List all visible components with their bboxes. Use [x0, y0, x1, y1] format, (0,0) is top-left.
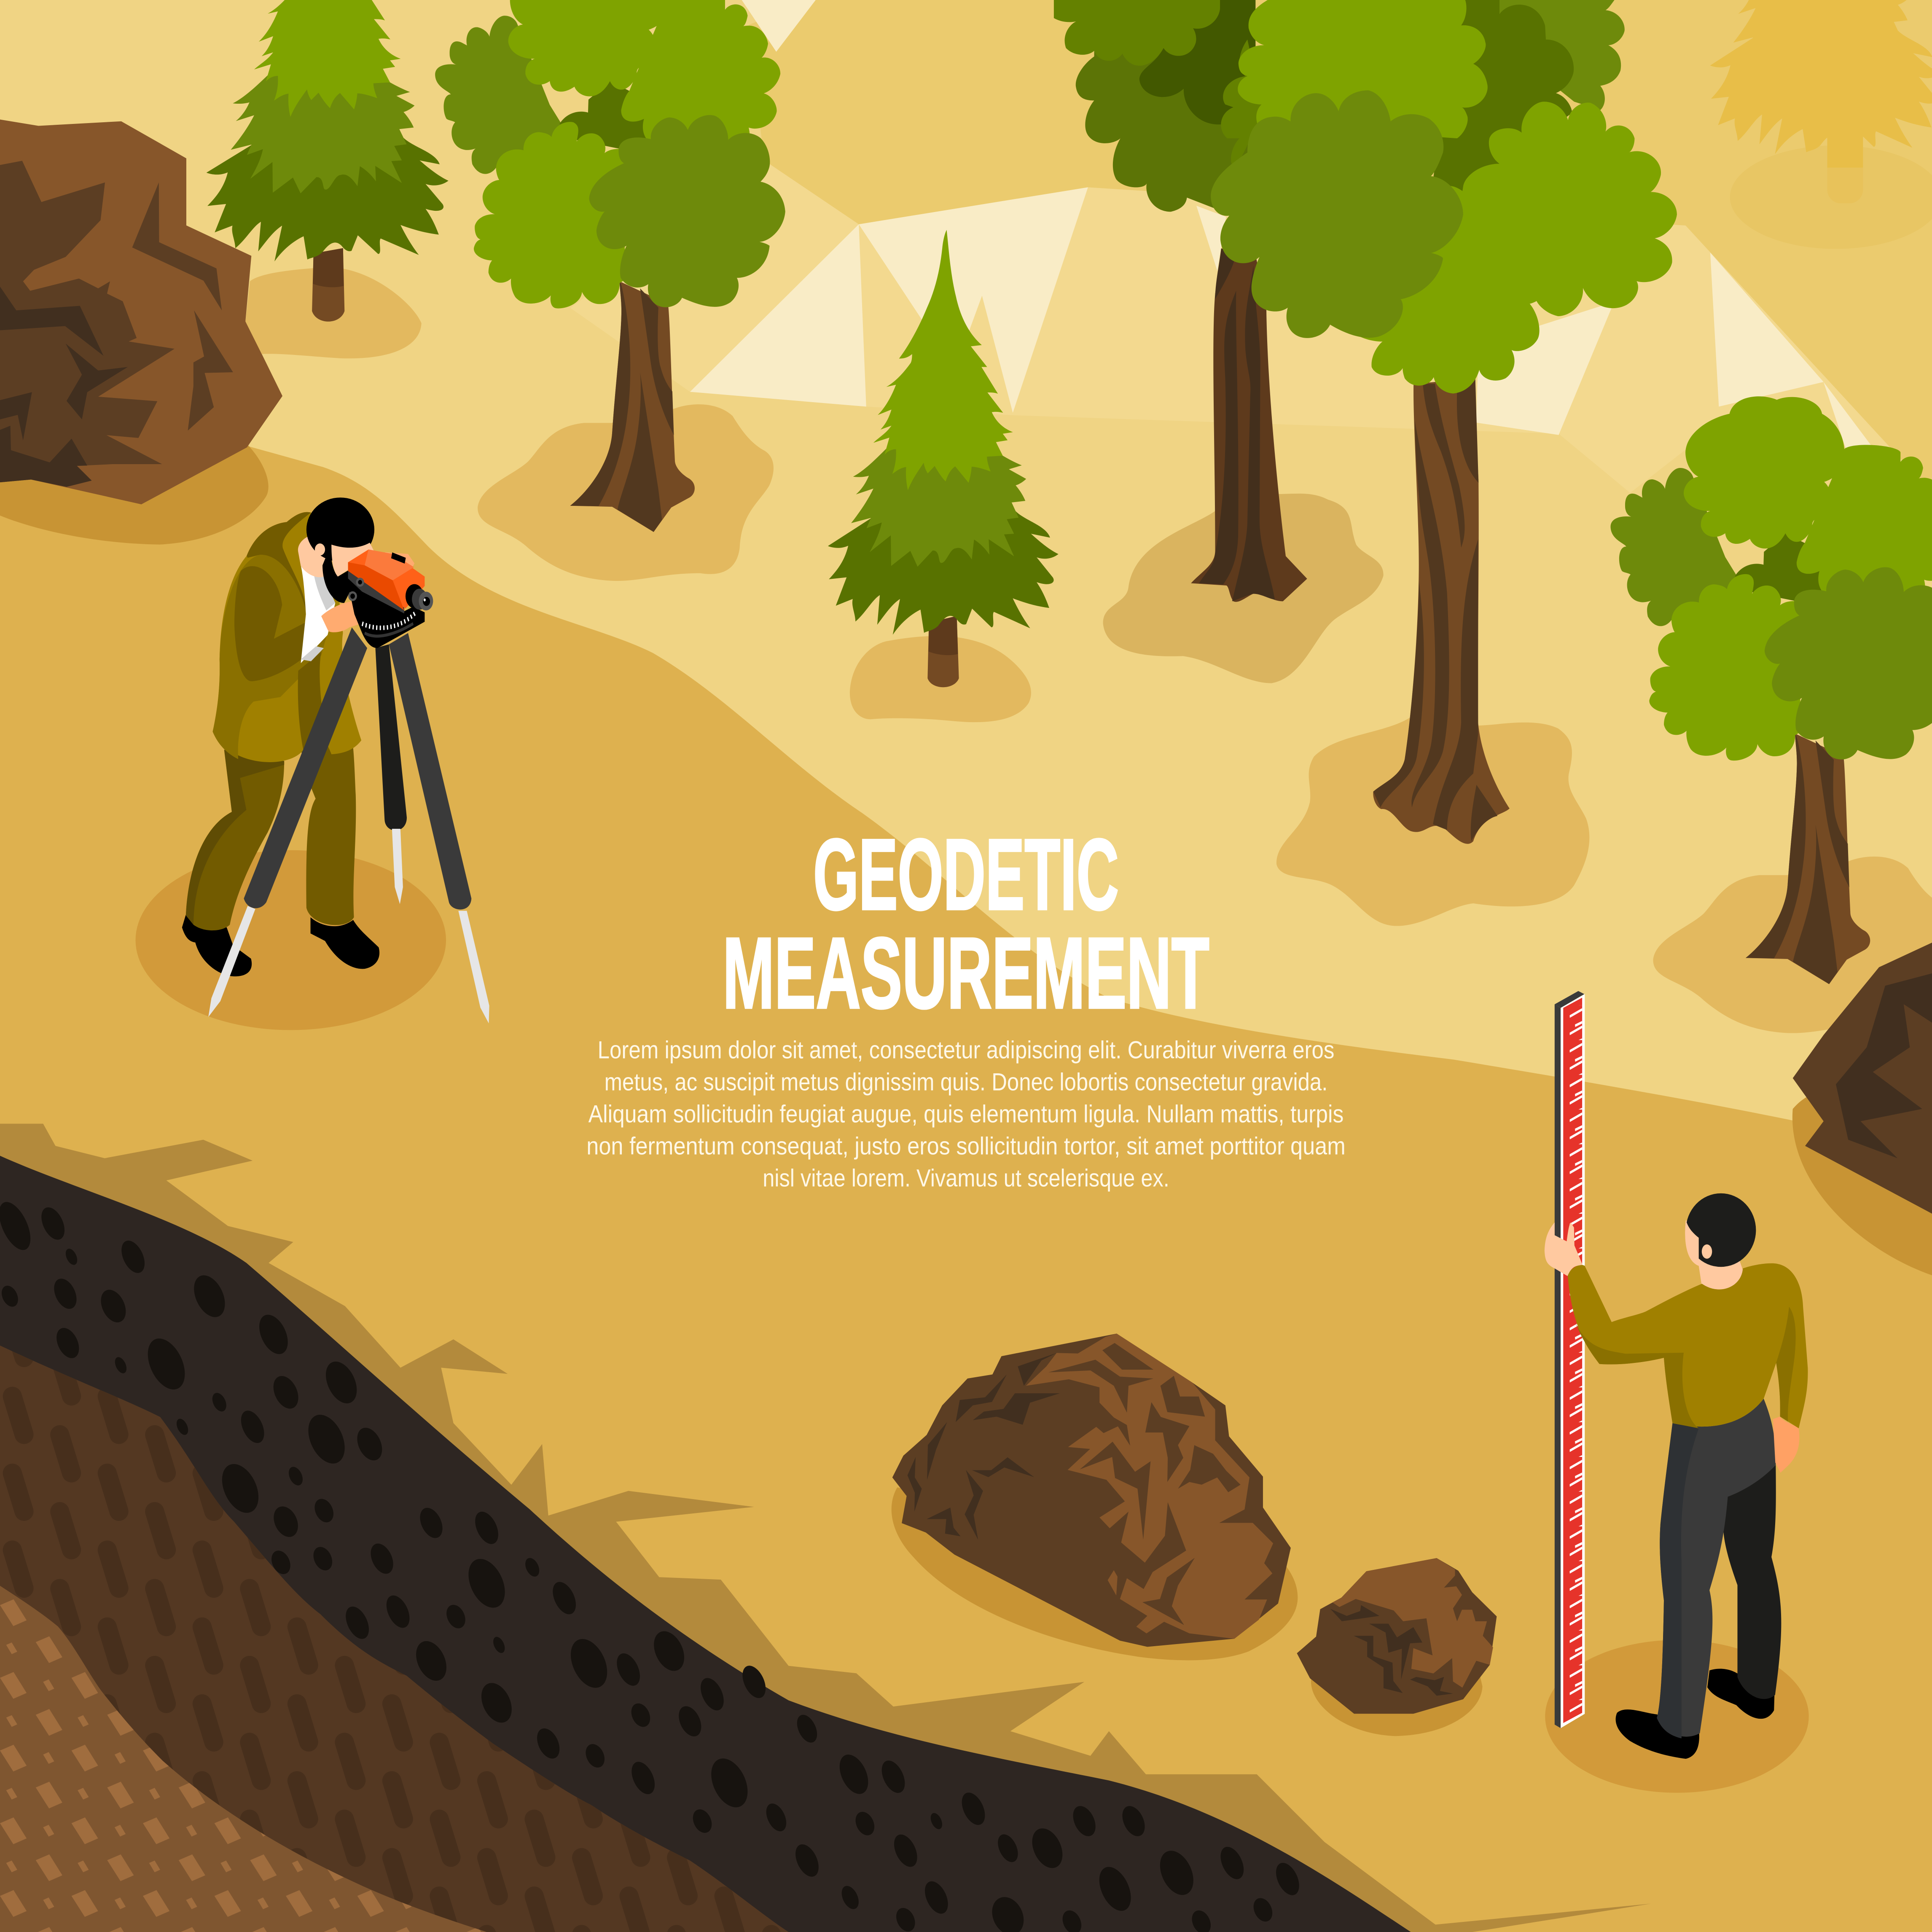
crowns	[1054, 0, 1255, 212]
assistant sweater	[1567, 1263, 1808, 1428]
trunk	[570, 281, 695, 532]
ground shadow	[1276, 717, 1589, 926]
assistant trousers	[1657, 1399, 1781, 1739]
assistant left hand	[1545, 1223, 1583, 1276]
assistant shoes	[1616, 1669, 1774, 1759]
surveyor shirt	[301, 565, 335, 663]
soil layer: black porous stratum	[0, 1156, 1411, 1932]
rock: right edge boulder with shadow	[1792, 943, 1932, 1275]
rock: top-left boulder with shadow	[0, 120, 282, 545]
tree: spruce centre	[828, 230, 1059, 722]
surveyor head	[298, 497, 374, 603]
ground shadow	[1103, 494, 1384, 683]
crowns	[1211, 0, 1677, 394]
person: surveyor shadow	[136, 850, 446, 1030]
trunk	[1373, 378, 1510, 844]
assistant right hand	[1773, 1416, 1799, 1473]
soil layer: brown stratum	[0, 1346, 789, 1932]
title: GEODETIC	[813, 818, 1119, 931]
surveyor jacket	[212, 512, 361, 762]
rock: centre boulder with shadow	[892, 1333, 1298, 1660]
tripod legs	[208, 627, 489, 1024]
levelling staff	[1555, 991, 1585, 1728]
body text: Aliquam sollicitudin feugiat augue, quis elementum ligula. Nullam mattis, turpis	[588, 1101, 1344, 1128]
tree: deciduous tall	[1211, 0, 1677, 926]
tree: deciduous left	[435, 0, 785, 581]
soil layer: light brown stratum	[0, 1586, 487, 1932]
person: surveyor with tripod and level	[182, 497, 489, 1024]
body text: nisl vitae lorem. Vivamus ut scelerisque ex.	[763, 1165, 1169, 1192]
ground shadow	[478, 404, 774, 581]
trunk	[1191, 248, 1307, 602]
level instrument	[348, 549, 433, 648]
body text: Lorem ipsum dolor sit amet, consectetur adipiscing elit. Curabitur viverra eros	[598, 1037, 1334, 1064]
tree: faded background spruce top-right	[1710, 0, 1932, 249]
background facets: pale polygons	[570, 0, 1932, 493]
tree: deciduous right	[1610, 396, 1932, 1033]
person: assistant shadow	[1545, 1640, 1809, 1793]
lower ground	[0, 407, 1932, 1932]
person: assistant holding levelling staff	[1545, 991, 1808, 1759]
crowns	[435, 0, 785, 309]
sandy cliff edge	[0, 1124, 1651, 1932]
rock: small boulder with shadow	[1297, 1558, 1497, 1736]
title: MEASUREMENT	[723, 916, 1209, 1029]
surveyor hand	[321, 601, 361, 632]
tree: spruce top-left	[207, 0, 449, 358]
body text: metus, ac suscipit metus dignissim quis. Donec lobortis consectetur gravida.	[605, 1069, 1327, 1096]
title	[723, 818, 1209, 1029]
tree: deciduous centre-back	[1054, 0, 1384, 683]
body text	[586, 1037, 1346, 1192]
body text: non fermentum consequat, justo eros sollicitudin tortor, sit amet porttitor quam	[586, 1133, 1346, 1160]
assistant head	[1685, 1193, 1756, 1293]
surveyor legs and shoes	[182, 748, 379, 976]
